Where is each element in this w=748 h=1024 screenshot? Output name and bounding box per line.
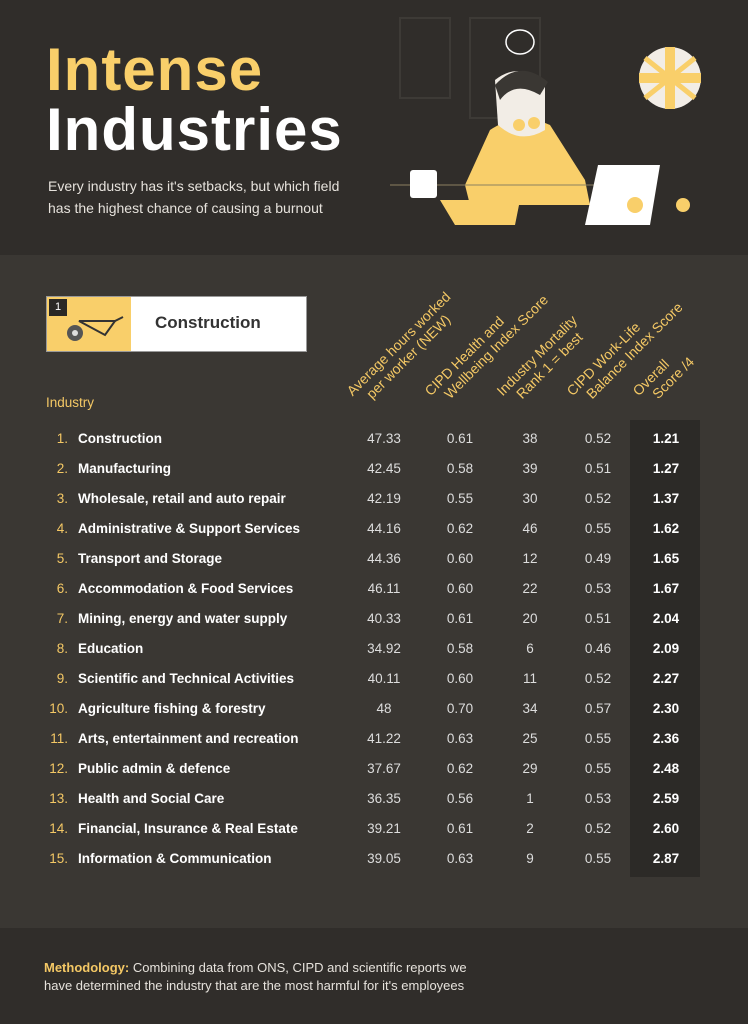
methodology [44,960,467,993]
table rows: 11 [523,671,537,686]
table rows: 2.09 [653,641,679,656]
table rows: 39.05 [367,851,401,866]
table rows: 0.51 [585,461,611,476]
table rows: 0.49 [585,551,611,566]
table rows: 0.52 [585,671,611,686]
table rows: 39.21 [367,821,401,836]
table rows: 0.58 [447,641,473,656]
table rows: 37.67 [367,761,401,776]
table rows: Manufacturing [78,461,171,476]
text: Industry [46,395,94,410]
table rows: 1.67 [653,581,679,596]
text: Rank 1 = best [513,329,586,402]
table rows: 9. [57,671,68,686]
table rows: Arts, entertainment and recreation [78,731,299,746]
table rows: 39 [522,461,538,476]
table rows: 9 [526,851,534,866]
table rows: 34 [522,701,538,716]
table rows: 1.37 [653,491,679,506]
table rows: 40.33 [367,611,401,626]
title: Intense [46,36,263,103]
construction badge [46,296,307,352]
table rows: 1.21 [653,431,679,446]
construction badge: 1 [55,301,61,313]
table rows: 0.63 [447,851,473,866]
table rows: 47.33 [367,431,401,446]
table rows: Health and Social Care [78,791,224,806]
table rows: Mining, energy and water supply [78,611,287,626]
table rows: 3. [57,491,68,506]
table rows: 46.11 [368,581,400,596]
text: Industry Mortality [493,312,580,399]
table rows: 1. [57,431,68,446]
table rows: 0.52 [585,491,611,506]
table rows: 29 [522,761,538,776]
text: Average hours worked [343,288,454,399]
table rows: 0.62 [447,761,473,776]
table rows: 44.16 [367,521,401,536]
table rows: 0.60 [447,581,473,596]
table rows: 0.57 [585,701,611,716]
table rows: 41.22 [367,731,401,746]
table rows: 2.59 [653,791,679,806]
table rows: Scientific and Technical Activities [78,671,294,686]
table rows: 0.53 [585,581,611,596]
text: CIPD Work-Life [563,319,643,399]
table rows: 6. [57,581,68,596]
methodology: have determined the industry that are the most harmful for it's employees [44,978,464,993]
table rows: 0.52 [585,431,611,446]
table rows: 38 [522,431,538,446]
table rows [49,431,680,866]
table rows: Transport and Storage [78,551,222,566]
icon: wheelbarrow [67,316,124,341]
table rows: 4. [57,521,68,536]
table rows: 2.27 [653,671,679,686]
table rows: 12. [49,761,68,776]
table rows: 12 [522,551,538,566]
construction badge: Construction [155,313,261,332]
subtitle: Every industry has it's setbacks, but which field [48,178,339,194]
table rows: 0.60 [447,551,473,566]
table rows: 15. [49,851,68,866]
table rows: 0.63 [447,731,473,746]
table rows: 2. [57,461,68,476]
table rows: 0.52 [585,821,611,836]
table rows: 20 [522,611,538,626]
table rows: 13. [49,791,68,806]
table rows: 1 [526,791,534,806]
text: per worker (NEW) [363,311,453,402]
table rows: 7. [57,611,68,626]
table rows: 14. [49,821,68,836]
subtitle: has the highest chance of causing a burnout [48,200,323,216]
table rows: 48 [376,701,392,716]
table rows: 0.61 [447,821,473,836]
table rows: Construction [78,431,162,446]
table rows: 22 [522,581,538,596]
table rows: 34.92 [367,641,401,656]
table rows: Agriculture fishing & forestry [78,701,266,716]
table rows: Information & Communication [78,851,272,866]
table rows: 0.70 [447,701,473,716]
table rows: 1.65 [653,551,679,566]
table rows: 42.19 [367,491,401,506]
table rows: 2.87 [653,851,679,866]
table rows: Administrative & Support Services [78,521,300,536]
text: Score /4 [649,354,697,402]
table rows: 5. [57,551,68,566]
subtitle [48,178,339,216]
icon: UK flag [639,47,701,109]
table rows: 36.35 [367,791,401,806]
table rows: 0.55 [585,851,611,866]
table rows: Education [78,641,143,656]
column headers [46,288,697,410]
table rows: 0.62 [447,521,473,536]
table rows: 0.58 [447,461,473,476]
table rows: 0.55 [585,521,611,536]
table rows: 0.61 [447,611,473,626]
table rows: 0.60 [447,671,473,686]
table rows: 2 [526,821,534,836]
text: Overall [629,356,672,399]
table rows: 0.46 [585,641,611,656]
table rows: 2.60 [653,821,679,836]
text: Wellbeing Index Score [441,292,551,402]
table rows: 1.62 [653,521,679,536]
table rows: 8. [57,641,68,656]
illustration: stressed worker [390,17,701,225]
title: Industries [46,96,343,163]
text: CIPD Health and [421,313,507,399]
table rows: Accommodation & Food Services [78,581,293,596]
table rows: 2.30 [653,701,679,716]
table rows: 30 [522,491,538,506]
table rows: Public admin & defence [78,761,230,776]
table rows: 0.53 [585,791,611,806]
score column background [630,420,700,877]
table rows: 11. [50,731,68,746]
table rows: 1.27 [653,461,679,476]
title [46,36,343,163]
table rows: Wholesale, retail and auto repair [78,491,286,506]
table rows: 10. [49,701,68,716]
table rows: 0.55 [585,761,611,776]
table rows: 44.36 [367,551,401,566]
table rows: 46 [522,521,538,536]
table rows: 6 [526,641,534,656]
table rows: 42.45 [367,461,401,476]
table rows: 0.61 [447,431,473,446]
table rows: 0.55 [585,731,611,746]
table rows: 2.48 [653,761,679,776]
table rows: 2.36 [653,731,679,746]
table rows: 0.56 [447,791,473,806]
methodology: Methodology: Combining data from ONS, CIPD and scientific reports we [44,960,467,975]
table rows: 0.55 [447,491,473,506]
table rows: 0.51 [585,611,611,626]
text: Balance Index Score [583,299,686,402]
table section background [0,255,748,928]
table rows: 2.04 [653,611,679,626]
table rows: Financial, Insurance & Real Estate [78,821,298,836]
table rows: 25 [522,731,538,746]
table rows: 40.11 [368,671,400,686]
